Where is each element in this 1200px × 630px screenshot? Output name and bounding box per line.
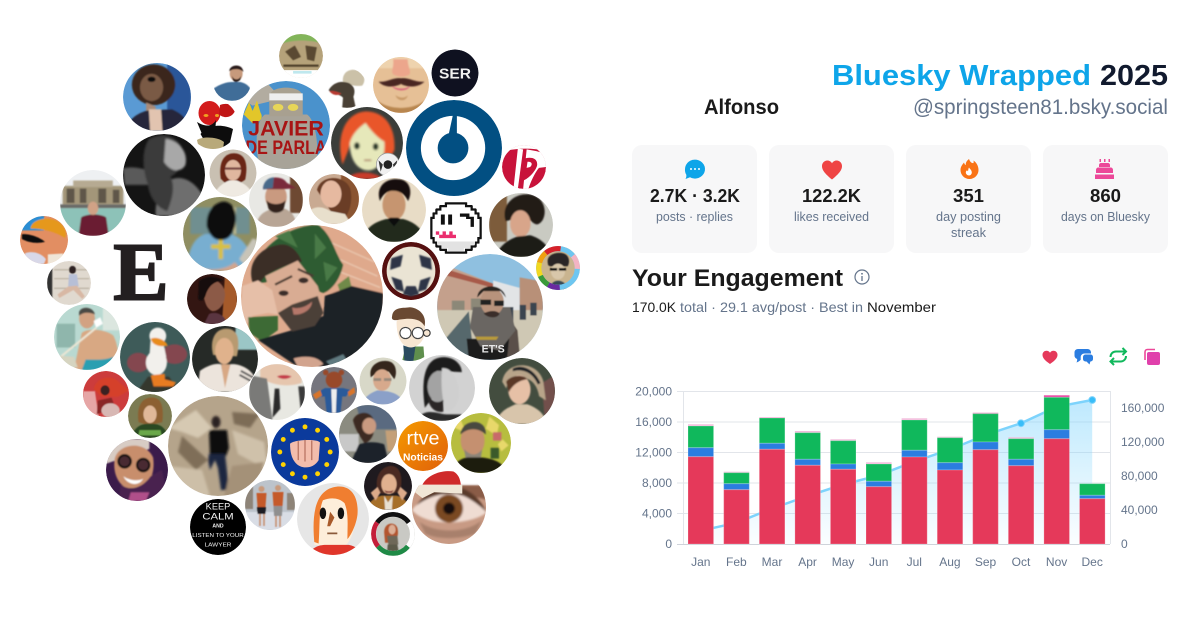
month labels: Mar: [762, 555, 782, 569]
engagement summary: 170.0K: [632, 299, 677, 315]
avatar: keep calm poster: AND: [212, 524, 224, 530]
month labels: Oct: [1012, 555, 1031, 569]
month labels: Jun: [869, 555, 888, 569]
avatar: brown-haired woman selfie: [309, 174, 359, 224]
avatar: cartoon orange-haired face: [297, 483, 369, 555]
avatar: figure in red hat: [83, 371, 129, 418]
avatar: bear puppet: [311, 367, 357, 413]
bars: [688, 395, 1105, 544]
avatar: small redhead in ring: [371, 512, 415, 556]
chart grid: [677, 391, 1110, 544]
panel: day posting streak stat: [906, 145, 1031, 253]
avatar: Jane Austen portrait: [489, 358, 555, 424]
avatar: red P logo: [502, 145, 546, 189]
left axis labels: 8,000: [642, 476, 672, 490]
stat value: 2.7K · 3.2K: [650, 186, 740, 206]
avatar: cartoon man with glasses: [392, 307, 430, 361]
avatar: man at Trafalgar Square: [60, 170, 126, 236]
avatar: Hellboy: [197, 101, 235, 149]
avatar: pixel ghost Boo: [431, 203, 481, 253]
avatar: rtve Noticias logo: Noticias: [403, 452, 443, 464]
avatar: E logo: E: [113, 226, 169, 318]
bar: April: [795, 431, 820, 544]
panel: days on Bluesky stat: [1043, 145, 1168, 253]
avatar: shirtless man with telephone: [54, 304, 120, 370]
left axis labels: 20,000: [635, 384, 672, 398]
right axis labels: 0: [1121, 537, 1128, 551]
month labels: Jul: [907, 555, 922, 569]
title: Bluesky Wrapped: Bluesky Wrapped: [832, 60, 1091, 92]
panel: avatar bubble cluster: [20, 34, 580, 556]
month labels: Apr: [798, 555, 817, 569]
month labels: Aug: [939, 555, 961, 569]
avatar: EU fist: [271, 418, 339, 486]
month labels: Nov: [1046, 555, 1067, 569]
stat value: 860: [1090, 186, 1121, 206]
avatar: keep calm poster: LAWYER: [205, 543, 231, 549]
left axis labels: 0: [665, 537, 672, 551]
avatar: two men in orange shirts: [245, 480, 295, 530]
avatar: cartoon face in rainbow ring: [536, 246, 580, 290]
avatar: long-bearded man: ET'S: [482, 344, 505, 356]
avatar: Javier de Parla mummy cartoon: [242, 81, 330, 169]
month labels: Feb: [726, 555, 747, 569]
avatar: keep calm poster: LISTEN TO YOUR: [192, 533, 244, 539]
avatar: man with glitter background: [451, 413, 511, 473]
stat label: days on Bluesky: [1061, 210, 1151, 224]
avatar: woman in car: [192, 326, 258, 392]
bar: December: [1080, 484, 1105, 544]
avatar: blue circular logo: [406, 100, 502, 196]
icon: replies bubbles: [1074, 349, 1093, 364]
avatar: eye with santa hat: [412, 471, 486, 544]
avatar: short-haired person with round glasses: [360, 358, 406, 404]
avatar: dark illustrated girl: [187, 274, 237, 324]
icon: heart: [822, 160, 842, 180]
avatar: black-and-white woman: [123, 134, 205, 216]
avatar: Javier de Parla mummy cartoon: DE PARLA: [246, 137, 326, 159]
engagement summary: [632, 299, 936, 315]
stat label: likes received: [794, 210, 869, 224]
avatar: moustache close-up: [373, 57, 429, 113]
avatar: man in cap with beard: [249, 173, 303, 227]
avatar: E logo: [114, 244, 166, 300]
bar: July: [902, 418, 927, 544]
panel: likes received stat: [769, 145, 894, 253]
avatar: Javier de Parla mummy cartoon: JAVIER: [248, 118, 324, 141]
left axis labels: 16,000: [635, 415, 672, 429]
right axis labels: [1121, 401, 1165, 551]
bar: January: [688, 424, 714, 544]
display name: Alfonso: [704, 96, 779, 119]
avatar: raptor with wool hat: [329, 70, 364, 108]
avatar: keep calm poster: [190, 499, 246, 555]
right axis labels: 80,000: [1121, 469, 1158, 483]
avatar: woman in white blouse and tie: [249, 364, 305, 420]
month labels: Sep: [975, 555, 996, 569]
engagement summary: total · 29.1 avg/post · Best in: [680, 299, 863, 315]
avatar: vintage football: [382, 242, 440, 300]
bar: May: [830, 439, 856, 544]
handle: @springsteen81.bsky.social: [913, 96, 1168, 119]
avatar: red-haired woman with glasses: [210, 150, 256, 196]
line marker October: [1018, 420, 1024, 427]
chart: monthly engagement stacked bars with cumulative line: [635, 384, 1165, 569]
avatar: woman with dark curly hair: [489, 193, 553, 257]
engagement summary: November: [867, 299, 936, 315]
panel: posts and replies stat: [632, 145, 757, 253]
icon: chat bubble: [685, 160, 705, 179]
avatar: rtve Noticias logo: rtve: [406, 428, 440, 450]
icon: repost arrows: [1110, 348, 1126, 365]
right axis labels: 160,000: [1121, 401, 1165, 415]
avatar: man with Vader mask: [183, 197, 257, 271]
avatar: sketched dome with green top: [279, 34, 323, 78]
avatar: long-haired rocker: [128, 394, 172, 438]
avatar: keep calm poster: CALM: [202, 512, 234, 523]
stat label second line: streak: [951, 226, 987, 240]
line marker December: [1089, 397, 1096, 403]
avatar: dog-faced woman: [123, 63, 191, 131]
stat value: 122.2K: [802, 186, 861, 206]
month labels: Dec: [1082, 555, 1103, 569]
icon: quotes squares: [1145, 350, 1160, 365]
avatar: woman with hand behind head: [339, 405, 397, 463]
bar: September: [973, 413, 998, 544]
avatar: curly-haired man: [362, 178, 426, 242]
avatar: keep calm poster: KEEP: [206, 502, 230, 513]
avatar: long-bearded man: [437, 254, 543, 360]
bar: June: [866, 462, 892, 544]
icon: likes heart: [1042, 351, 1058, 364]
avatar: woman on desert rocks: [168, 396, 268, 496]
left axis labels: 12,000: [635, 446, 672, 460]
avatar: anime red-haired girl: [331, 107, 403, 179]
bar: March: [759, 417, 785, 544]
month labels: [691, 555, 1103, 569]
avatar: cartoon with orange cap: [20, 216, 68, 264]
avatar: man covering eye with hand: [409, 355, 475, 421]
right axis labels: 120,000: [1121, 435, 1165, 449]
avatar: cartoon duck: [120, 322, 190, 392]
title: year: 2025: [1100, 60, 1168, 92]
stat label: posts · replies: [656, 210, 733, 224]
month labels: Jan: [691, 555, 710, 569]
bar: October: [1008, 437, 1034, 544]
avatar: SER logo: [432, 50, 478, 96]
legend icons: [1042, 348, 1160, 365]
stat label: day posting: [936, 210, 1001, 224]
avatar: main profile photo: [241, 225, 383, 367]
icon: cake: [1095, 159, 1114, 179]
cumulative area: [701, 400, 1092, 544]
left axis labels: [635, 384, 672, 551]
avatar: man in blue shirt: [213, 65, 251, 101]
bar: February: [724, 472, 749, 544]
bar: November: [1044, 395, 1070, 544]
right axis labels: 40,000: [1121, 503, 1158, 517]
avatar: sketch of a girl: [47, 261, 91, 305]
left axis labels: 4,000: [642, 506, 672, 520]
icon: flame: [960, 159, 978, 179]
bar: August: [937, 437, 963, 544]
avatar: rtve Noticias logo: [398, 421, 448, 471]
month labels: May: [832, 555, 854, 569]
avatar: woman pulling face: [364, 462, 412, 510]
cumulative line: [701, 400, 1092, 531]
avatar: smiling man with glasses, purple tint: [106, 439, 168, 501]
heading: Your Engagement: Your Engagement: [632, 265, 843, 292]
icon: info: [855, 270, 869, 284]
avatar: SER logo: SER: [439, 66, 471, 83]
stat value: 351: [953, 186, 984, 206]
